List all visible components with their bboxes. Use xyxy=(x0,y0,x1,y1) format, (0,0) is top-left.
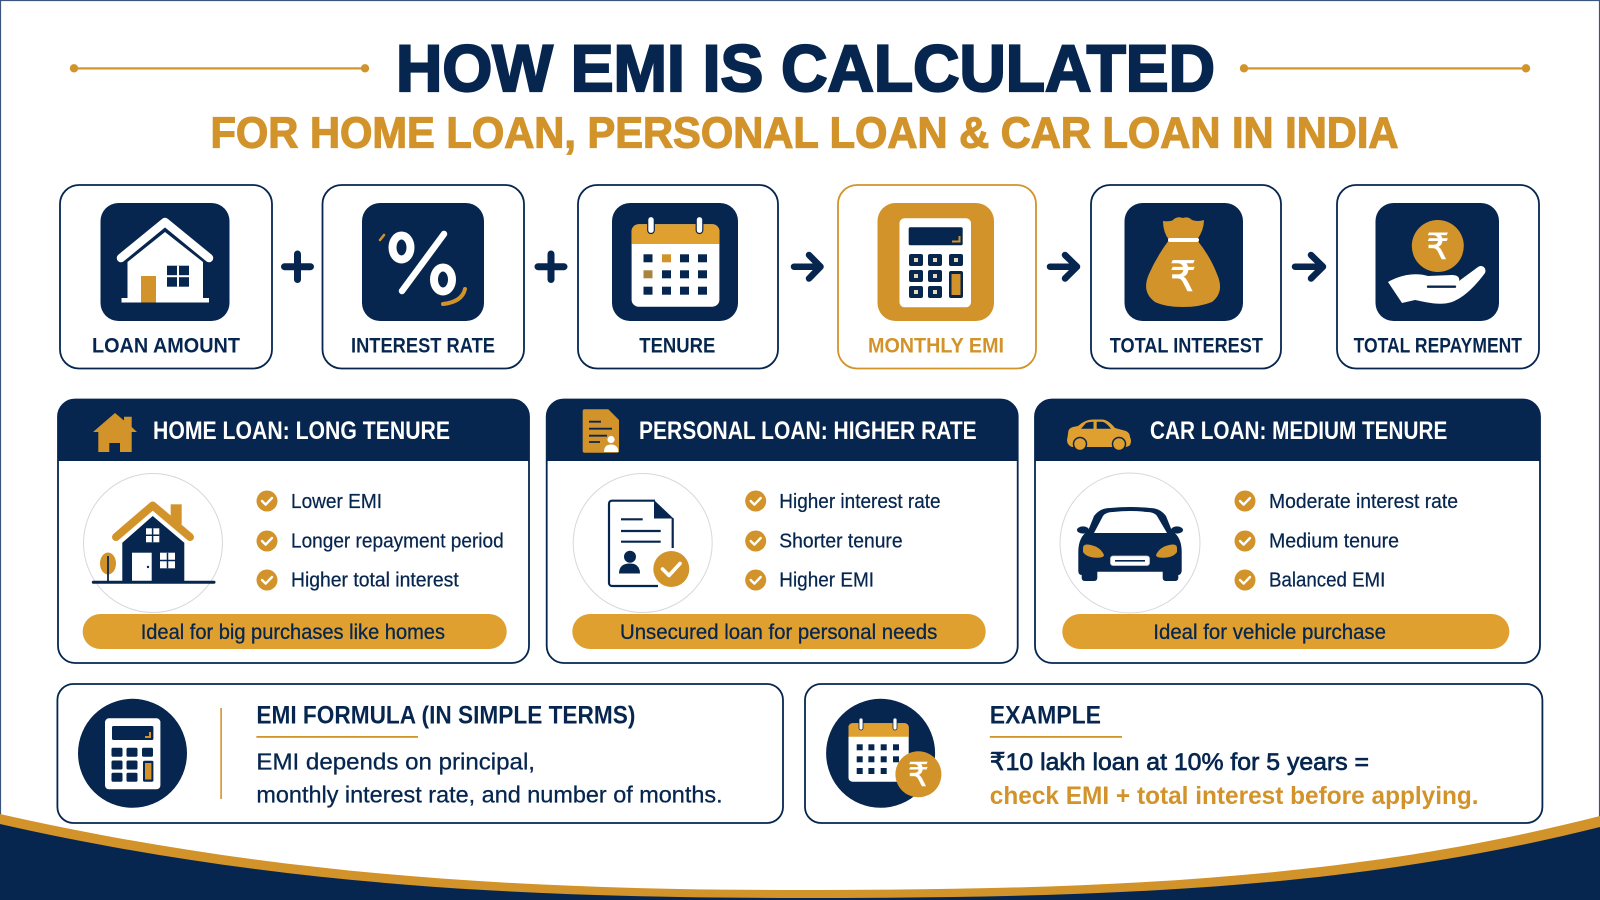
checklist: Balanced EMI xyxy=(1269,569,1385,592)
checklist: Higher interest rate xyxy=(779,490,941,513)
label: TOTAL REPAYMENT xyxy=(1354,335,1522,358)
illustration: document xyxy=(573,474,712,612)
icon: arrow xyxy=(794,255,820,278)
label: LOAN AMOUNT xyxy=(92,335,240,358)
icon: small document xyxy=(583,409,619,453)
panel: total interest xyxy=(1091,185,1281,368)
icon: arrow xyxy=(1050,255,1077,278)
pill note: Ideal for vehicle purchase xyxy=(1153,621,1386,644)
icon: house xyxy=(100,203,230,321)
panel: home loan xyxy=(58,400,529,663)
panel: car loan xyxy=(1035,400,1540,663)
illustration: car xyxy=(1060,473,1200,613)
example line: ₹10 lakh loan at 10% for 5 years = xyxy=(990,749,1369,776)
checklist xyxy=(745,490,941,592)
panel: loan amount xyxy=(60,185,272,368)
checklist: Higher EMI xyxy=(779,569,874,592)
card header xyxy=(547,400,1018,461)
icon: plus xyxy=(284,254,310,280)
body text xyxy=(256,748,723,808)
body text: EMI depends on principal, xyxy=(256,748,535,774)
pill note: Ideal for big purchases like homes xyxy=(141,621,445,644)
card header xyxy=(58,400,529,461)
icon: hand with coin xyxy=(1376,203,1499,321)
divider xyxy=(220,708,222,799)
icon: calendar with rupee coin xyxy=(826,699,941,808)
checklist: Moderate interest rate xyxy=(1269,490,1458,513)
checklist xyxy=(256,490,504,592)
icon: small car xyxy=(1067,420,1131,450)
label: TENURE xyxy=(639,335,715,358)
example highlight: check EMI + total interest before applying. xyxy=(990,782,1479,810)
icon: plus xyxy=(538,254,564,280)
heading: CAR LOAN: MEDIUM TENURE xyxy=(1150,417,1447,445)
checklist: Lower EMI xyxy=(291,490,382,513)
icon: calendar xyxy=(612,203,738,321)
pill note xyxy=(83,614,507,649)
pill note: Unsecured loan for personal needs xyxy=(620,621,937,644)
checklist: Medium tenure xyxy=(1269,530,1399,552)
icon: calculator circle xyxy=(78,699,187,808)
panel: total repayment xyxy=(1337,185,1539,368)
heading rule xyxy=(256,736,418,738)
title rule left xyxy=(70,64,369,73)
panel: tenure xyxy=(578,185,778,368)
icon: money bag: ₹ xyxy=(1170,253,1196,300)
icon: small house xyxy=(93,413,137,452)
checklist: Shorter tenure xyxy=(779,530,903,552)
illustration: house xyxy=(84,474,222,612)
panel: example xyxy=(805,684,1542,823)
heading: PERSONAL LOAN: HIGHER RATE xyxy=(639,417,977,445)
title: HOW EMI IS CALCULATED xyxy=(396,31,1215,105)
icon: arrow xyxy=(1295,255,1323,278)
icon: percent xyxy=(362,203,484,321)
bottom wave xyxy=(0,814,1600,900)
icon: money bag xyxy=(1124,203,1243,321)
pill note xyxy=(1062,614,1509,649)
icon: calculator xyxy=(878,203,994,321)
body text: monthly interest rate, and number of months. xyxy=(256,782,723,808)
checklist xyxy=(1234,490,1458,592)
panel: interest rate xyxy=(322,185,524,368)
heading: EMI FORMULA (IN SIMPLE TERMS) xyxy=(256,701,635,729)
checklist: Higher total interest xyxy=(291,569,459,592)
heading rule xyxy=(990,736,1122,738)
icon: calendar with rupee coin: ₹ xyxy=(908,756,929,793)
label: MONTHLY EMI xyxy=(868,335,1004,358)
icon: hand with coin: ₹ xyxy=(1426,226,1449,267)
checklist: Longer repayment period xyxy=(291,530,504,552)
pill note xyxy=(572,614,986,649)
subtitle: FOR HOME LOAN, PERSONAL LOAN & CAR LOAN IN INDIA xyxy=(210,109,1398,158)
title rule right xyxy=(1240,64,1530,73)
label: TOTAL INTEREST xyxy=(1110,335,1263,358)
label: INTEREST RATE xyxy=(351,335,495,358)
panel: monthly EMI xyxy=(838,185,1036,368)
heading: EXAMPLE xyxy=(990,701,1101,729)
heading: HOME LOAN: LONG TENURE xyxy=(153,417,450,445)
panel: personal loan xyxy=(547,400,1018,663)
title block xyxy=(210,31,1398,158)
panel: EMI formula xyxy=(57,684,783,823)
card header xyxy=(1035,400,1540,461)
